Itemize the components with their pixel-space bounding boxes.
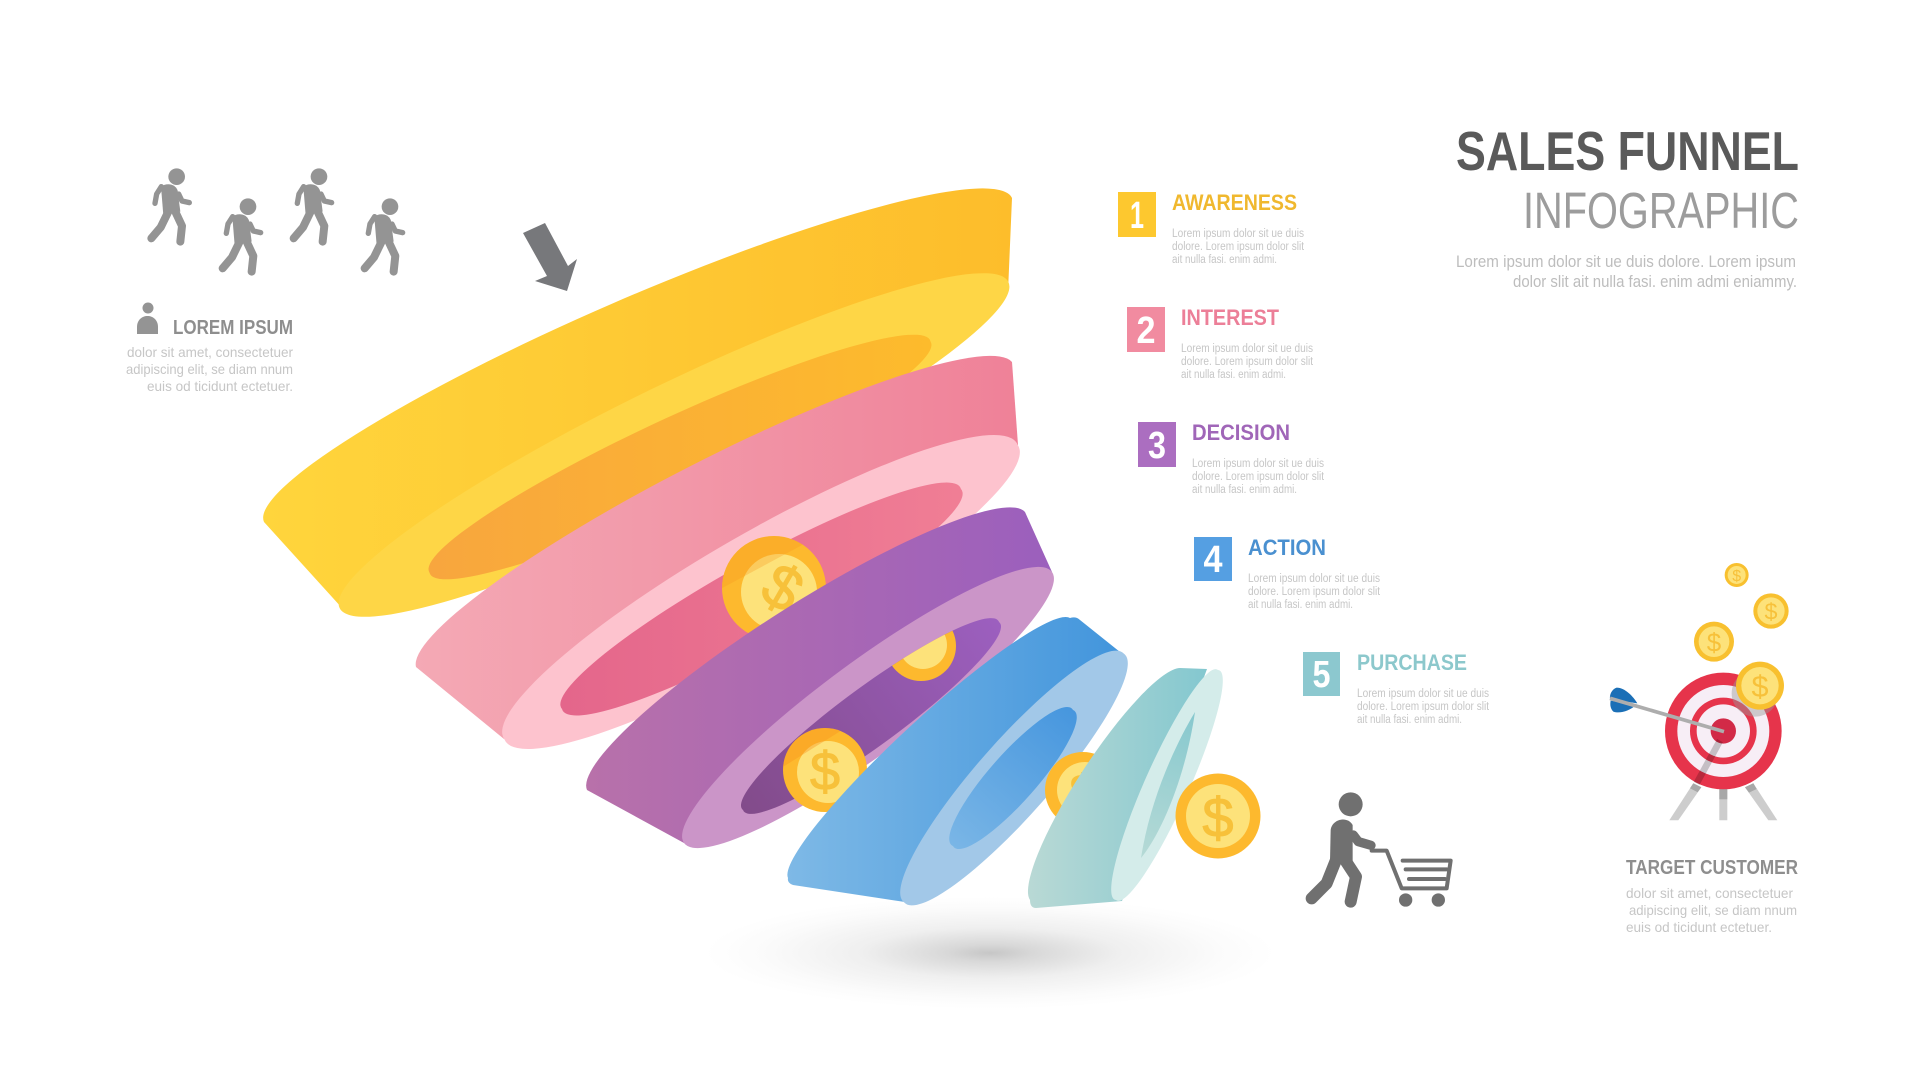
text block: lorem ipsum [126, 317, 293, 394]
badge 5: 5 [1312, 654, 1330, 696]
body: lorem ipsum: dolor sit amet, consectetuer [127, 344, 293, 360]
coin in front of teal stage: $ [1202, 786, 1234, 849]
falling coin 2 [1753, 593, 1789, 629]
body purchase: Lorem ipsum dolor sit ue duis [1357, 688, 1489, 700]
body awareness: Lorem ipsum dolor sit ue duis [1172, 228, 1304, 240]
coin stack [1694, 563, 1789, 717]
falling coin 1: $ [1732, 568, 1741, 585]
body: target customer: dolor sit amet, consectetuer [1626, 885, 1793, 901]
badge 4 [1194, 537, 1232, 581]
falling coin 1 [1725, 563, 1749, 587]
body decision: dolore. Lorem ipsum dolor slit [1192, 471, 1325, 483]
body: target customer: euis od ticidunt ectetuer. [1626, 919, 1772, 935]
step 3: decision [1138, 420, 1325, 496]
target rings [1665, 673, 1782, 789]
coin in pink stage [722, 536, 826, 633]
badge 2: 2 [1136, 310, 1156, 352]
icon: target with arrow and coins [1610, 563, 1789, 820]
body action: dolore. Lorem ipsum dolor slit [1248, 586, 1381, 598]
intro text [1456, 252, 1797, 291]
badge 5 [1303, 652, 1340, 696]
intro text: dolor slit ait nulla fasi. enim admi eniammy. [1513, 272, 1797, 291]
step 5: purchase [1303, 650, 1490, 726]
title line 1: SALES FUNNEL [1456, 120, 1799, 182]
coin over purple rim: $ [810, 742, 840, 802]
icon: small person [137, 302, 158, 334]
body interest [1181, 343, 1314, 381]
coin behind teal stage [1045, 752, 1121, 828]
falling coin 4 [1736, 662, 1784, 710]
body interest: Lorem ipsum dolor sit ue duis [1181, 343, 1313, 355]
person walking 4 [365, 198, 403, 272]
badge 2 [1127, 307, 1165, 352]
badge 1 [1118, 192, 1156, 237]
body: lorem ipsum: euis od ticidunt ectetuer. [147, 378, 293, 394]
person walking 2 [223, 198, 261, 272]
body interest: dolore. Lorem ipsum dolor slit [1181, 356, 1314, 368]
icon: group of walking people [151, 168, 403, 272]
funnel stage 3: purple [586, 507, 1054, 848]
text block: target customer [1626, 857, 1798, 935]
coin in purple stage [892, 630, 956, 681]
body action: ait nulla fasi. enim admi. [1248, 599, 1353, 611]
body decision: Lorem ipsum dolor sit ue duis [1192, 458, 1324, 470]
coin in front of teal stage [1176, 774, 1260, 858]
coin in pink stage: $ [750, 550, 814, 627]
person walking 1 [151, 168, 189, 242]
badge 1: 1 [1130, 195, 1144, 237]
falling coin 4: $ [1751, 670, 1769, 704]
body purchase [1357, 688, 1490, 726]
body: target customer: adipiscing elit, se diam nnum [1629, 902, 1797, 918]
heading decision: DECISION [1192, 420, 1290, 445]
badge 3 [1138, 422, 1176, 467]
heading action: ACTION [1248, 535, 1326, 560]
heading awareness: AWARENESS [1172, 190, 1297, 215]
funnel stage 1: yellow [263, 188, 1012, 617]
badge 4: 4 [1204, 539, 1222, 581]
intro text: Lorem ipsum dolor sit ue duis dolore. Lorem ipsum [1456, 252, 1796, 271]
heading interest: INTEREST [1181, 305, 1279, 330]
body awareness [1172, 228, 1305, 266]
body action: Lorem ipsum dolor sit ue duis [1248, 573, 1380, 585]
funnel stage 5: teal [1028, 668, 1223, 908]
step 1: awareness [1118, 190, 1305, 266]
body: lorem ipsum [126, 344, 293, 394]
body action [1248, 573, 1381, 611]
body purchase: dolore. Lorem ipsum dolor slit [1357, 701, 1490, 713]
target stand [1669, 783, 1777, 820]
heading purchase: PURCHASE [1357, 650, 1467, 675]
shadow under funnel [705, 897, 1275, 1009]
body: target customer [1626, 885, 1797, 935]
dart [1610, 688, 1724, 732]
title [1456, 120, 1799, 239]
falling coin 3: $ [1707, 627, 1722, 657]
icon: person with shopping cart [1312, 792, 1451, 907]
body decision: ait nulla fasi. enim admi. [1192, 484, 1297, 496]
falling coin 3 [1694, 622, 1734, 662]
body awareness: dolore. Lorem ipsum dolor slit [1172, 241, 1305, 253]
body purchase: ait nulla fasi. enim admi. [1357, 714, 1462, 726]
funnel [263, 188, 1260, 908]
person walking 3 [294, 168, 332, 242]
step 2: interest [1127, 305, 1314, 381]
body awareness: ait nulla fasi. enim admi. [1172, 254, 1277, 266]
title line 2: INFOGRAPHIC [1523, 182, 1799, 239]
heading: target customer: TARGET CUSTOMER [1626, 857, 1798, 879]
funnel stage 2: pink [416, 356, 1020, 749]
body decision [1192, 458, 1325, 496]
coin behind teal stage: $ [1070, 766, 1096, 819]
coin over purple rim [783, 728, 867, 812]
heading: lorem ipsum: LOREM IPSUM [173, 317, 293, 339]
icon: arrow into funnel [523, 223, 577, 291]
badge 3: 3 [1148, 425, 1166, 467]
coin shadow [1732, 670, 1778, 717]
body interest: ait nulla fasi. enim admi. [1181, 369, 1286, 381]
step 4: action [1194, 535, 1381, 611]
falling coin 2: $ [1764, 599, 1777, 625]
funnel stage 4: blue [787, 617, 1128, 905]
body: lorem ipsum: adipiscing elit, se diam nnum [126, 361, 293, 377]
